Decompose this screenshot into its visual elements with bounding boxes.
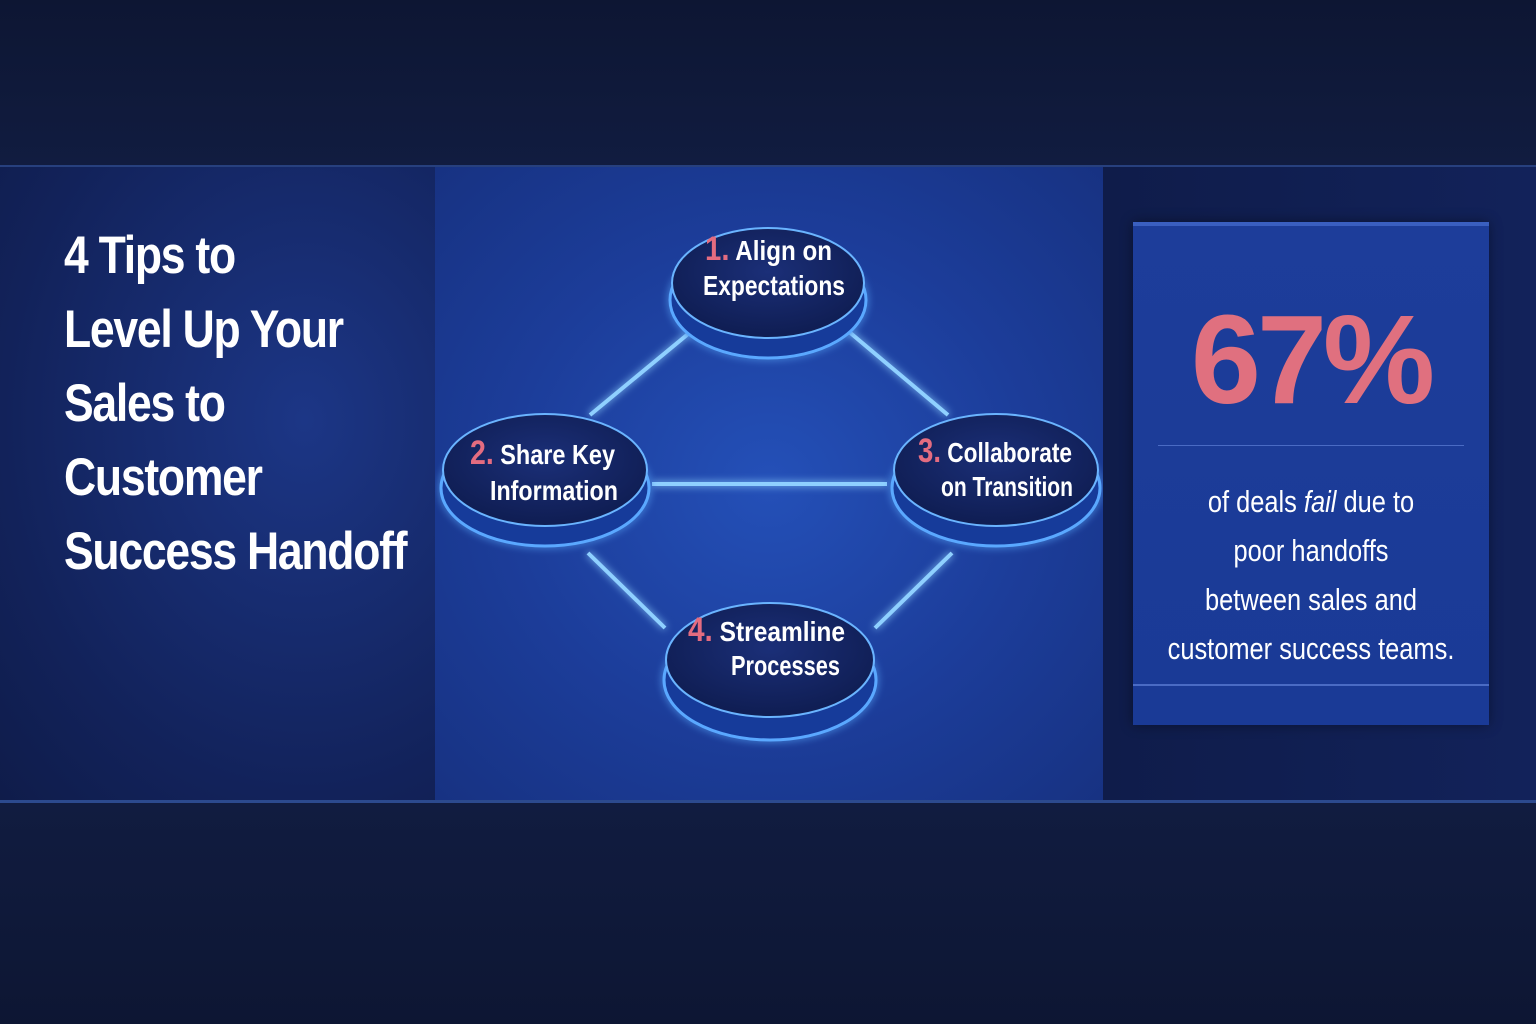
title: Sales to: [64, 374, 225, 433]
title: [64, 226, 408, 581]
node 1: 1. Align on: [705, 230, 832, 268]
stat card: [1133, 222, 1489, 725]
stat description: customer success teams.: [1168, 631, 1454, 666]
node 3: 3. Collaborate: [918, 432, 1072, 470]
title: 4 Tips to: [64, 226, 235, 285]
title: Level Up Your: [64, 300, 343, 359]
stat description: of deals fail due to: [1208, 484, 1414, 519]
stat description: between sales and: [1205, 582, 1417, 617]
node 1: [670, 228, 866, 358]
title: Customer: [64, 448, 262, 507]
node 4: 4. Streamline: [688, 611, 845, 649]
stat description: [1168, 484, 1454, 666]
node 4: Processes: [731, 650, 840, 681]
node 4: [664, 603, 876, 740]
node 3: [892, 414, 1100, 546]
node 1: Expectations: [703, 270, 845, 301]
connector lines: [588, 320, 952, 628]
title: Success Handoff: [64, 522, 406, 581]
node 2: 2. Share Key: [470, 434, 615, 472]
stat number: 67%: [1191, 289, 1431, 430]
panel: diagram: [435, 167, 1103, 800]
node 2: [441, 414, 649, 546]
panel: right stat area: [1103, 167, 1536, 800]
node 2: Information: [490, 475, 618, 506]
panel: left title area: [0, 167, 435, 800]
stat description: poor handoffs: [1233, 533, 1389, 568]
